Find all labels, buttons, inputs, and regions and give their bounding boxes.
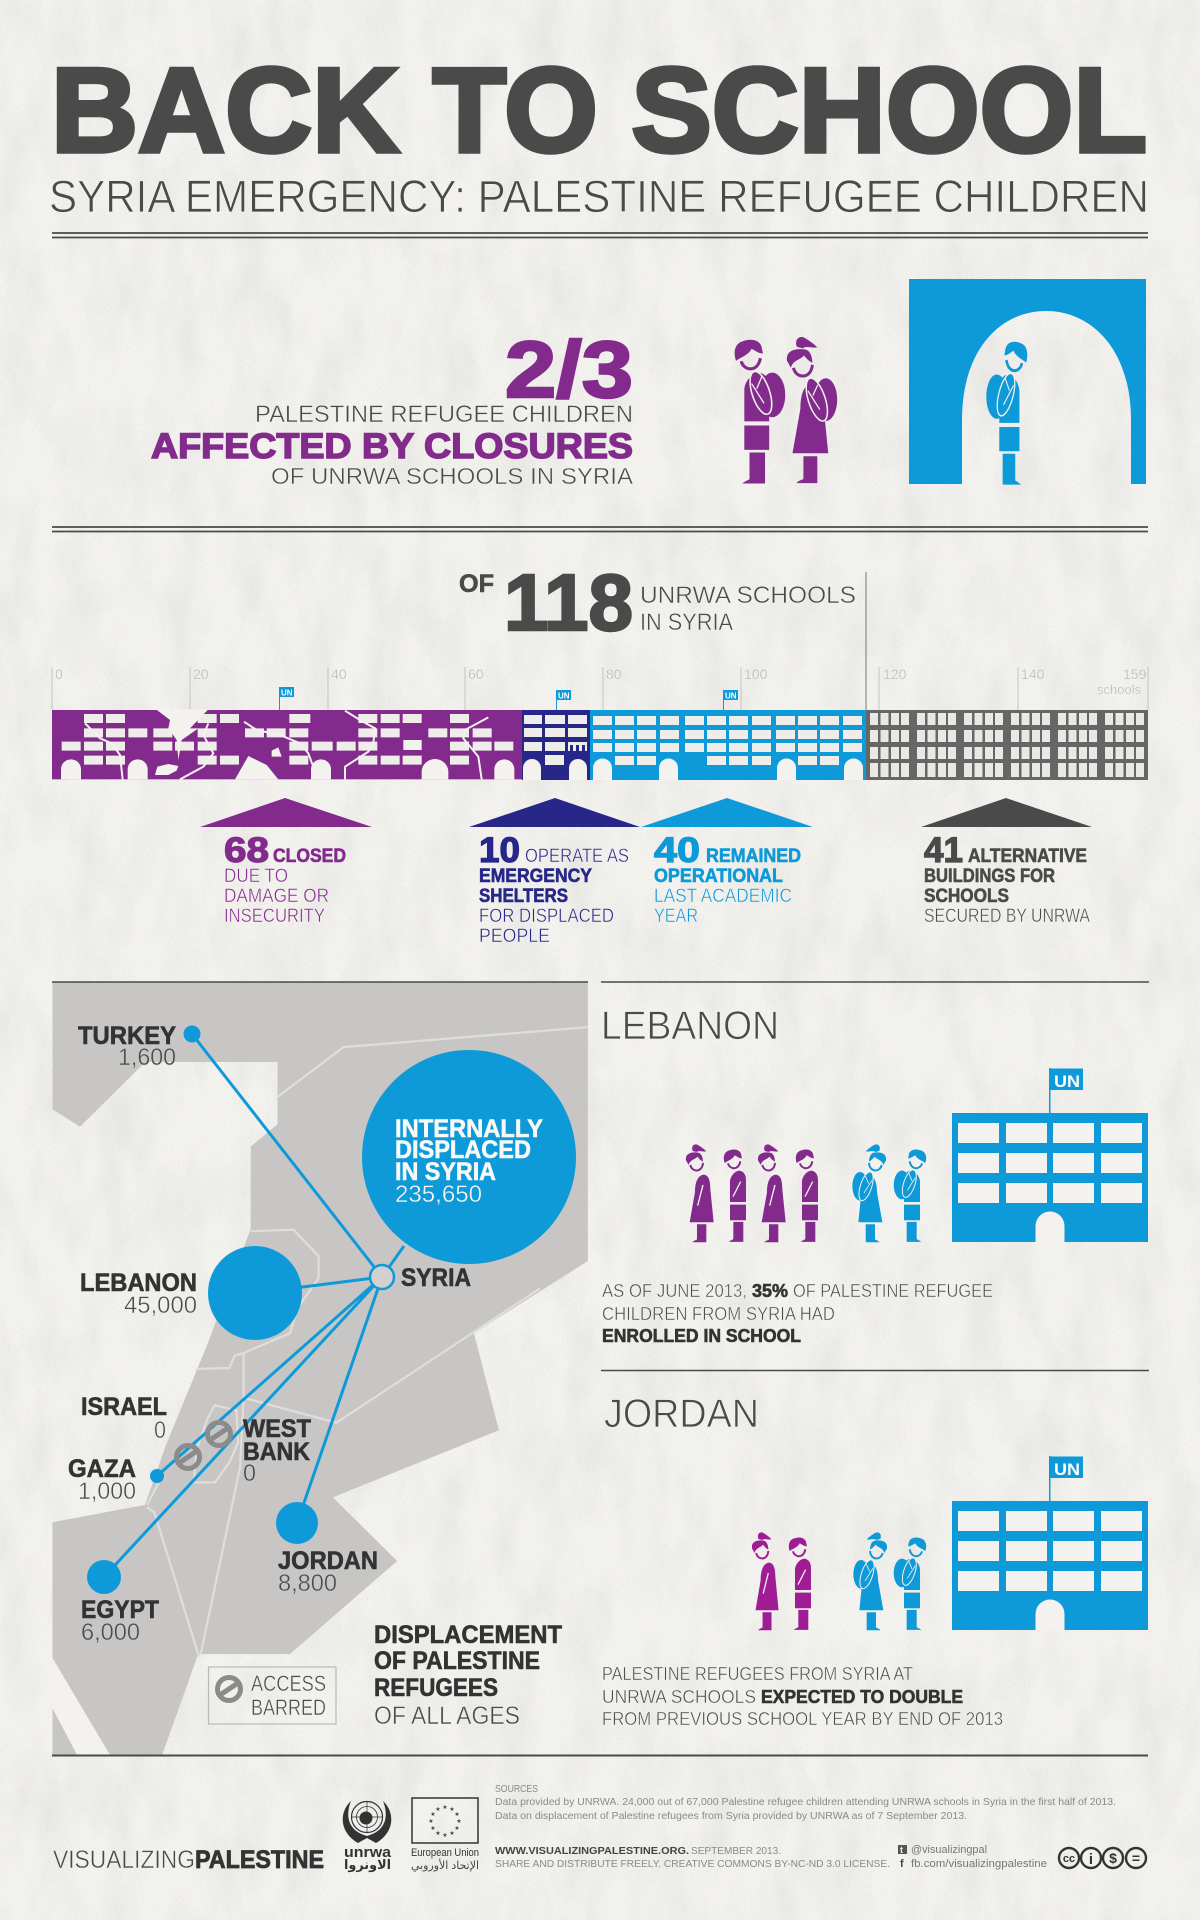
label: israel: 0 xyxy=(154,1417,166,1444)
node: lebanon: LEBANON xyxy=(80,1269,197,1297)
node: syria: SYRIA xyxy=(401,1264,471,1292)
label: israel xyxy=(81,1393,167,1444)
logo: european union: ★ xyxy=(449,1806,455,1813)
logo: european union: European Union xyxy=(411,1847,479,1859)
statistic: two thirds affected xyxy=(151,325,634,489)
node: jordan: JORDAN xyxy=(278,1547,378,1575)
axis scale: 0 xyxy=(55,666,63,682)
text: jordan expected double: UNRWA SCHOOLS xyxy=(602,1687,756,1707)
callout: 68 closed: DAMAGE OR xyxy=(224,886,329,907)
text: lebanon enrolment: 35% xyxy=(752,1281,788,1301)
logo: visualizing palestine: VISUALIZING xyxy=(53,1846,195,1874)
creative commons icons xyxy=(1059,1848,1146,1868)
node: egypt xyxy=(81,1560,159,1646)
school bar: alternative buildings (grey) xyxy=(866,710,1148,780)
creative commons icons: cc xyxy=(1063,1853,1075,1865)
callout: 41 alternative buildings: SECURED BY UNRWA xyxy=(924,906,1090,927)
website and licence xyxy=(495,1845,890,1870)
map land xyxy=(52,982,588,1755)
node: egypt: 6,000 xyxy=(81,1619,140,1646)
node: lebanon xyxy=(80,1246,302,1340)
school bar: operational (blue) xyxy=(590,710,866,780)
un flags on bar: UN xyxy=(725,692,737,700)
circle: internally displaced in syria: DISPLACED xyxy=(395,1136,531,1164)
map title: OF ALL AGES xyxy=(374,1702,520,1730)
label: west bank: BANK xyxy=(243,1438,310,1466)
callout: 10 emergency shelters: SHELTERS xyxy=(479,886,568,907)
logo: un emblem and unrwa xyxy=(343,1801,392,1872)
axis scale: 80 xyxy=(606,666,622,682)
node: jordan xyxy=(276,1502,378,1597)
callout: 41 alternative buildings: ALTERNATIVE xyxy=(968,846,1087,867)
social links: f xyxy=(900,1858,904,1870)
creative commons icons: $ xyxy=(1109,1850,1117,1866)
heading: of 118 schools: 118 xyxy=(504,558,633,647)
logo: european union: ★ xyxy=(456,1818,462,1825)
node: lebanon: 45,000 xyxy=(124,1292,197,1319)
text: lebanon enrolment: AS OF JUNE 2013, xyxy=(602,1281,747,1301)
callout: 40 remained operational: YEAR xyxy=(654,906,698,927)
legend: access barred: BARRED xyxy=(251,1695,326,1720)
un flags on bar: UN xyxy=(281,688,293,698)
axis scale: 40 xyxy=(331,666,347,682)
callout: 68 closed: 68 xyxy=(224,831,269,870)
logo: european union: ★ xyxy=(435,1806,441,1813)
map title: OF PALESTINE xyxy=(374,1647,540,1675)
stat line one: PALESTINE REFUGEE CHILDREN xyxy=(255,401,633,428)
logo: european union xyxy=(411,1798,479,1872)
logo: un emblem and unrwa: الاونروا xyxy=(344,1857,391,1872)
axis scale: schools xyxy=(1097,682,1142,697)
text: lebanon enrolment: ENROLLED IN SCHOOL xyxy=(602,1326,801,1346)
label: israel: ISRAEL xyxy=(81,1393,167,1421)
map title: DISPLACEMENT xyxy=(374,1621,562,1649)
node: gaza xyxy=(68,1455,164,1505)
sources xyxy=(495,1784,1116,1822)
logo: european union: ★ xyxy=(435,1830,441,1837)
node: turkey: 1,600 xyxy=(118,1044,176,1071)
logo: european union: ★ xyxy=(454,1811,460,1818)
social links xyxy=(898,1844,1047,1870)
icon row: jordan children xyxy=(752,1532,926,1630)
social links: t xyxy=(900,1845,903,1855)
logo: european union: ★ xyxy=(430,1811,436,1818)
un flags on bar xyxy=(279,687,738,710)
logo: european union: ★ xyxy=(428,1818,434,1825)
callout: 41 alternative buildings: 41 xyxy=(924,831,963,870)
un flags on bar: UN xyxy=(558,692,570,700)
access barred markers xyxy=(176,1422,230,1468)
callout: 10 emergency shelters: FOR DISPLACED xyxy=(479,906,614,927)
axis scale: 20 xyxy=(193,666,209,682)
panel: displacement map xyxy=(52,982,588,1755)
axis scale: 120 xyxy=(883,666,907,682)
callout: 10 emergency shelters: OPERATE AS xyxy=(525,846,629,867)
sources: Data on displacement of Palestine refugees from Syria provided by UNRWA as of 7 September 2013. xyxy=(495,1810,967,1822)
circle: internally displaced in syria xyxy=(362,1050,576,1264)
creative commons icons: i xyxy=(1089,1851,1093,1868)
icon: un school lebanon xyxy=(952,1068,1148,1242)
heading: lebanon: LEBANON xyxy=(601,1004,779,1048)
node: gaza: GAZA xyxy=(68,1455,136,1483)
callout: 41 alternative buildings xyxy=(921,798,1092,927)
icon: girl with backpack xyxy=(787,337,837,483)
axis scale: 60 xyxy=(468,666,484,682)
callout: 40 remained operational: OPERATIONAL xyxy=(654,866,783,887)
callout: 40 remained operational: 40 xyxy=(654,831,700,870)
callout: 68 closed: CLOSED xyxy=(273,846,346,867)
heading: of 118 schools: OF xyxy=(459,570,494,598)
icon: boy with backpack xyxy=(735,340,785,484)
label: west bank: 0 xyxy=(243,1460,256,1487)
callout: 10 emergency shelters: 10 xyxy=(479,831,520,870)
icon: un school lebanon: UN xyxy=(1054,1072,1080,1091)
label: west bank: WEST xyxy=(243,1415,311,1443)
panel: lebanon xyxy=(601,982,1149,1346)
logo: european union: الإتحاد الأوروبي xyxy=(411,1858,479,1872)
icon: un school jordan: UN xyxy=(1054,1460,1080,1479)
callout: 40 remained operational: REMAINED xyxy=(706,846,801,867)
website and licence: WWW.VISUALIZINGPALESTINE.ORG. xyxy=(495,1845,689,1857)
node: turkey: TURKEY xyxy=(78,1022,176,1050)
logo: european union: ★ xyxy=(449,1830,455,1837)
circle: internally displaced in syria: 235,650 xyxy=(395,1181,482,1208)
logo: un emblem and unrwa: unrwa xyxy=(344,1844,392,1861)
legend: access barred: ACCESS xyxy=(251,1671,326,1696)
icon: school arch xyxy=(909,279,1146,484)
node: egypt: EGYPT xyxy=(81,1596,159,1624)
logo: visualizing palestine: PALESTINE xyxy=(195,1846,324,1874)
map title xyxy=(374,1621,562,1730)
callout: 10 emergency shelters: PEOPLE xyxy=(479,926,550,947)
axis scale: 140 xyxy=(1021,666,1045,682)
subtitle: SYRIA EMERGENCY: PALESTINE REFUGEE CHILDREN xyxy=(49,171,1149,222)
heading: of 118 schools: UNRWA SCHOOLS xyxy=(640,582,856,609)
icon: un school jordan xyxy=(952,1456,1148,1630)
icon: child in arch xyxy=(986,342,1027,485)
icon row: lebanon children xyxy=(686,1144,926,1242)
axis scale: 100 xyxy=(744,666,768,682)
callout: 68 closed xyxy=(200,798,372,927)
callout: 41 alternative buildings: BUILDINGS FOR xyxy=(924,866,1055,887)
creative commons icons: = xyxy=(1132,1850,1140,1866)
callout: 40 remained operational: LAST ACADEMIC xyxy=(654,886,792,907)
text: lebanon enrolment: OF PALESTINE REFUGEE xyxy=(793,1281,993,1301)
panel: jordan xyxy=(601,1370,1149,1729)
social links: fb.com/visualizingpalestine xyxy=(911,1858,1047,1870)
social links: @visualizingpal xyxy=(911,1844,987,1856)
title: BACK TO SCHOOL xyxy=(51,44,1147,178)
axis scale: 159 xyxy=(1123,666,1147,682)
node: gaza: 1,000 xyxy=(78,1478,136,1505)
text: lebanon enrolment xyxy=(602,1281,993,1346)
callout: 68 closed: INSECURITY xyxy=(224,906,325,927)
axis scale xyxy=(52,572,1148,710)
logo: european union: ★ xyxy=(442,1832,448,1839)
legend: access barred xyxy=(208,1667,336,1724)
text: jordan expected double: PALESTINE REFUGEES FROM SYRIA AT xyxy=(602,1664,913,1684)
text: jordan expected double: FROM PREVIOUS SCHOOL YEAR BY END OF 2013 xyxy=(602,1709,1003,1729)
website and licence: SHARE AND DISTRIBUTE FREELY. CREATIVE COMMONS BY-NC-ND 3.0 LICENSE. xyxy=(495,1858,890,1870)
stat number: 2/3 xyxy=(505,325,633,414)
node: turkey xyxy=(78,1022,200,1071)
circle: internally displaced in syria: IN SYRIA xyxy=(395,1158,496,1186)
callout: 68 closed: DUE TO xyxy=(224,866,288,887)
heading: of 118 schools xyxy=(459,558,856,647)
website and licence: SEPTEMBER 2013. xyxy=(691,1845,781,1857)
stat line three: OF UNRWA SCHOOLS IN SYRIA xyxy=(271,463,634,489)
node: syria xyxy=(370,1264,471,1292)
label: west bank xyxy=(243,1415,311,1487)
circle: internally displaced in syria: INTERNALLY xyxy=(395,1115,543,1143)
logo: european union: ★ xyxy=(442,1804,448,1811)
callout: 10 emergency shelters xyxy=(469,798,640,947)
logo: european union: ★ xyxy=(454,1825,460,1832)
sources: SOURCES xyxy=(495,1784,538,1795)
node: jordan: 8,800 xyxy=(278,1570,337,1597)
text: jordan expected double xyxy=(602,1664,1003,1729)
heading: of 118 schools: IN SYRIA xyxy=(640,609,733,636)
heading: jordan: JORDAN xyxy=(604,1392,759,1436)
school bar: emergency shelters (navy) xyxy=(522,710,590,780)
school bar: closed (purple) xyxy=(52,709,522,779)
logo: visualizing palestine xyxy=(53,1846,324,1874)
text: lebanon enrolment: CHILDREN FROM SYRIA HAD xyxy=(602,1304,835,1324)
flow lines xyxy=(104,1034,404,1577)
text: jordan expected double: EXPECTED TO DOUBLE xyxy=(761,1687,963,1707)
map title: REFUGEES xyxy=(374,1674,498,1702)
callout: 40 remained operational xyxy=(641,798,813,927)
stat line two: AFFECTED BY CLOSURES xyxy=(151,427,633,466)
sources: Data provided by UNRWA. 24,000 out of 67,000 Palestine refugee children attending UNRWA schools in Syria in the first half of 2013. xyxy=(495,1796,1116,1808)
logo: european union: ★ xyxy=(430,1825,436,1832)
callout: 10 emergency shelters: EMERGENCY xyxy=(479,866,592,887)
callout: 41 alternative buildings: SCHOOLS xyxy=(924,886,1009,907)
